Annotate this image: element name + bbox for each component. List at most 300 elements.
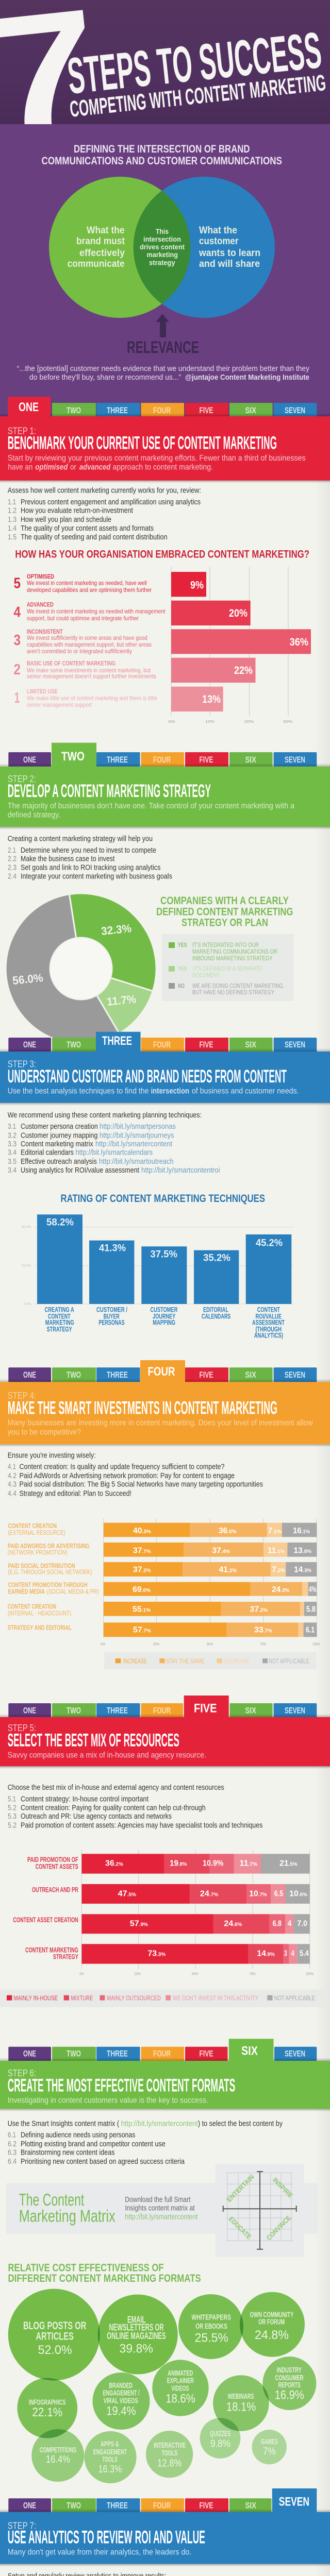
bubble: apps and tools: 16.3% bbox=[98, 2464, 122, 2475]
step 1 checklist bbox=[8, 487, 201, 541]
step 3 checklist: We recommend using these content marketing planning techniques: bbox=[8, 1111, 202, 1120]
bubble: own community bbox=[250, 2310, 293, 2342]
donut legend bbox=[162, 934, 293, 1001]
donut heading: COMPANIES WITH A CLEARLY bbox=[160, 895, 289, 907]
stacked row: content marketing strategy: 14.9% bbox=[257, 1950, 275, 1958]
chart legend: INCREASE bbox=[123, 1657, 147, 1665]
navigation tabs: step five: FOUR bbox=[153, 1706, 171, 1716]
stacked row: content creation internal: 55.1% bbox=[133, 1605, 151, 1614]
step 2 checklist: Determine where you need to invest to compete bbox=[21, 846, 156, 855]
column chart bbox=[22, 1214, 294, 1340]
bubble: competitions bbox=[40, 2446, 76, 2465]
bubble: branded engagement: ENGAGEMENT / bbox=[103, 2388, 140, 2397]
maturity level 5: 5 bbox=[13, 575, 21, 592]
stacked row: outreach and PR: 10.7% bbox=[249, 1890, 267, 1899]
resource mix stacked bar chart bbox=[0, 1850, 326, 2007]
column labels: ROI/VALUE bbox=[256, 1312, 282, 1320]
step 4 checklist: Paid AdWords or Advertising network promotion: Pay for content to engage bbox=[20, 1472, 235, 1480]
bubble: own community: 24.8% bbox=[255, 2328, 289, 2342]
stacked row: earned media: 69.0% bbox=[133, 1585, 151, 1594]
axis labels: 30% bbox=[283, 719, 292, 724]
matrix quadrant diagram: INSPIRE bbox=[271, 2176, 294, 2199]
maturity level 5: developed capabilities and are optimising them further bbox=[27, 586, 152, 594]
stacked row: content marketing strategy: 3 bbox=[284, 1950, 287, 1958]
step 5 checklist: 5.2 bbox=[8, 1822, 16, 1830]
donut legend: MARKETING COMMUNICATIONS OR bbox=[192, 948, 277, 955]
navigation tabs: step five: THREE bbox=[107, 1706, 128, 1716]
venn left label: brand must bbox=[76, 236, 125, 247]
stacked row: content asset creation: 6.8 bbox=[273, 1919, 282, 1928]
matrix quadrant diagram: ENTERTAIN bbox=[225, 2173, 256, 2204]
step 2 banner: The majority of businesses don't have one. Take control of your content marketing with a bbox=[8, 802, 294, 810]
navigation tabs: step three: SIX bbox=[245, 1040, 256, 1049]
step 1 section bbox=[0, 397, 330, 724]
step 4 checklist: 4.2 bbox=[8, 1472, 16, 1480]
navigation tabs: step two: THREE bbox=[107, 755, 128, 765]
row labels: PAID ADWORDS OR ADVERTISING bbox=[8, 1543, 90, 1550]
bubble: apps and tools bbox=[93, 2439, 127, 2475]
chart legend bbox=[104, 1652, 317, 1669]
navigation tabs: step one: THREE bbox=[107, 406, 128, 415]
axis labels: 0% bbox=[79, 1971, 84, 1976]
maturity level 5: OPTIMISED bbox=[27, 573, 54, 580]
bubble chart heading: DIFFERENT CONTENT MARKETING FORMATS bbox=[8, 2273, 201, 2284]
navigation tabs: step seven: FOUR bbox=[153, 2501, 171, 2510]
navigation tabs: step seven: SEVEN bbox=[279, 2495, 309, 2509]
column labels: BUYER bbox=[104, 1312, 120, 1320]
chart heading: rating of techniques: RATING OF CONTENT MARKETING TECHNIQUES bbox=[61, 1193, 265, 1205]
bubble: animated explainer videos bbox=[166, 2369, 195, 2405]
bubble: industry reports: CONSUMER bbox=[275, 2374, 304, 2382]
step 2 checklist: Integrate your content marketing with business goals bbox=[21, 873, 172, 881]
column values bbox=[46, 1216, 283, 1264]
maturity level 3: 3 bbox=[13, 632, 21, 649]
chart legend: MIXTURE bbox=[71, 1994, 93, 2002]
donut chart bbox=[6, 893, 156, 1044]
stacked row: content asset creation: 24.6% bbox=[224, 1919, 242, 1928]
column labels: MARKETING bbox=[45, 1319, 74, 1327]
step 3 banner: intersection bbox=[151, 1087, 189, 1096]
navigation tabs: step five: SIX bbox=[245, 1706, 256, 1716]
venn centre label: drives content bbox=[140, 243, 185, 251]
bubble: own community: OWN COMMUNITY bbox=[250, 2310, 293, 2319]
maturity level 3: We invest suffificiently in some areas and have good bbox=[27, 634, 147, 641]
step 5 checklist: Choose the best mix of in-house and external agency and content resources bbox=[8, 1784, 224, 1792]
venn right label: customer bbox=[199, 236, 239, 247]
bubble: whitepapers: WHITEPAPERS bbox=[191, 2313, 231, 2322]
navigation tabs: step one: TWO bbox=[67, 406, 81, 415]
column labels: CUSTOMER / bbox=[96, 1306, 127, 1314]
bar values: 9% bbox=[190, 580, 204, 591]
axis labels: 10% bbox=[205, 719, 214, 724]
donut heading: STRATEGY OR PLAN bbox=[182, 917, 268, 928]
step 3 checklist: Editorial calendars bbox=[21, 1149, 74, 1157]
stacked row: paid promotion: 10.9% bbox=[203, 1859, 224, 1868]
bubble: competitions: 16.4% bbox=[46, 2454, 70, 2465]
stacked row: content marketing strategy: 5.4 bbox=[300, 1950, 309, 1958]
step 1 checklist: 1.4 bbox=[8, 524, 16, 533]
row labels: (SOCIAL MEDIA & PR) bbox=[47, 1588, 99, 1595]
stacked row: paid adwords: 11.1% bbox=[268, 1546, 285, 1555]
bubble: webinars: 18.1% bbox=[226, 2400, 256, 2414]
maturity level 1: 1 bbox=[14, 690, 20, 706]
step 3 checklist: Using analytics for ROI/value assessment bbox=[21, 1166, 139, 1175]
navigation tabs: step three: TWO bbox=[67, 1040, 81, 1049]
maturity level 1: LIMITED USE bbox=[27, 688, 58, 695]
donut legend: DOCUMENT bbox=[192, 972, 220, 979]
stacked row: paid adwords: 37.7% bbox=[133, 1546, 151, 1555]
navigation tabs: step five: FIVE bbox=[194, 1701, 217, 1715]
venn diagram bbox=[49, 177, 275, 318]
stacked row: paid promotion: 19.8% bbox=[170, 1859, 187, 1868]
matrix panel title: Marketing Matrix bbox=[19, 2207, 116, 2226]
venn right label bbox=[199, 225, 260, 269]
navigation tabs: step three: THREE bbox=[102, 1034, 132, 1048]
matrix panel title: The Content bbox=[19, 2190, 84, 2209]
step 3 checklist: Content marketing matrix bbox=[21, 1140, 93, 1148]
step 2 checklist: 2.3 bbox=[8, 863, 16, 872]
bubble: blog posts: ARTICLES bbox=[36, 2331, 74, 2343]
axis labels: 25% bbox=[134, 1971, 141, 1976]
venn centre label: strategy bbox=[149, 259, 175, 267]
step 1 checklist: Assess how well content marketing currently works for you, review: bbox=[8, 487, 201, 495]
chart legend: DECREASE bbox=[224, 1657, 250, 1665]
step 3 banner bbox=[0, 1052, 330, 1106]
axis labels: 50% bbox=[207, 1641, 213, 1646]
column chart: 25.0% bbox=[22, 1264, 31, 1267]
navigation tabs: step one: SIX bbox=[245, 406, 256, 415]
columns bbox=[37, 1214, 291, 1304]
navigation tabs: step three: ONE bbox=[23, 1040, 36, 1049]
navigation tabs: step two bbox=[0, 743, 330, 769]
step 6 checklist: Defining audience needs using personas bbox=[21, 2131, 135, 2139]
bubble: interactive tools bbox=[154, 2441, 186, 2469]
step 1 checklist: Previous content engagement and amplification using analytics bbox=[21, 498, 201, 506]
navigation tabs: step one: SEVEN bbox=[285, 406, 305, 415]
maturity level 3 bbox=[13, 628, 152, 655]
stacked row: content creation internal: 37.2% bbox=[250, 1605, 268, 1614]
maturity level 4 bbox=[13, 601, 166, 622]
bubble: games: 7% bbox=[263, 2446, 276, 2457]
row labels: CONTENT CREATION bbox=[8, 1603, 56, 1611]
chart legend: STAY THE SAME bbox=[166, 1657, 205, 1665]
stacked row: paid social: 7.2% bbox=[272, 1566, 285, 1574]
step 1 checklist: How well you plan and schedule bbox=[21, 516, 111, 524]
navigation tabs: step seven: SIX bbox=[245, 2501, 256, 2510]
navigation tabs: step one: FOUR bbox=[153, 406, 171, 415]
step 1 banner: optimised bbox=[35, 463, 68, 472]
step 1 banner: or bbox=[70, 463, 76, 472]
step 2 checklist: 2.4 bbox=[8, 873, 16, 881]
step 3 checklist: Effective outreach analysis bbox=[21, 1158, 97, 1166]
matrix quadrant diagram: EDUCATE bbox=[227, 2215, 253, 2241]
quote: do before they'll buy, share or recommend us...” bbox=[29, 373, 181, 382]
step 3 checklist: Customer persona creation bbox=[21, 1123, 98, 1131]
navigation tabs: step three: SEVEN bbox=[285, 1040, 305, 1049]
row labels: OUTREACH AND PR bbox=[32, 1886, 78, 1893]
bubble: interactive tools: INTERACTIVE bbox=[154, 2441, 186, 2450]
venn centre label: marketing bbox=[146, 250, 178, 259]
maturity level 2: 2 bbox=[13, 662, 21, 678]
maturity level 4: 4 bbox=[13, 604, 21, 621]
bubble: games bbox=[261, 2437, 278, 2457]
step 3 checklist: 3.1 bbox=[8, 1123, 16, 1131]
matrix panel title bbox=[19, 2190, 116, 2226]
bubble: quizzes: 9.8% bbox=[210, 2438, 230, 2449]
navigation tabs: step six bbox=[0, 2039, 330, 2062]
step 7 banner bbox=[0, 2512, 330, 2567]
step 5 checklist bbox=[8, 1784, 262, 1830]
stacked row: paid adwords: 37.4% bbox=[212, 1546, 230, 1555]
step 6 banner: STEP 6: bbox=[8, 2067, 36, 2078]
row labels: CONTENT ASSETS bbox=[36, 1862, 78, 1870]
step 1 banner: STEP 1: bbox=[8, 426, 36, 436]
step 1 banner: advanced bbox=[79, 463, 111, 472]
donut legend: NO bbox=[178, 982, 185, 990]
step 6 checklist: 6.3 bbox=[8, 2149, 16, 2157]
column values: 35.2% bbox=[203, 1252, 230, 1264]
step 3 checklist: http://bit.ly/smartercontent bbox=[95, 1140, 172, 1148]
stacked row: outreach and PR: 6.5 bbox=[274, 1890, 283, 1899]
step 5 checklist: Paid promotion of content assets: Agencies may have specialist tools and techniques bbox=[21, 1822, 262, 1830]
navigation tabs: step seven: ONE bbox=[23, 2501, 36, 2510]
column labels: CONTENT bbox=[257, 1306, 280, 1314]
stacked row: outreach and PR: 47.5% bbox=[118, 1890, 136, 1899]
bubble: email newsletters: EMAIL bbox=[127, 2314, 145, 2325]
navigation tabs: step five: TWO bbox=[67, 1706, 81, 1716]
chart legend: MAINLY OUTSOURCED bbox=[107, 1994, 161, 2002]
stacked row: paid social bbox=[104, 1562, 317, 1577]
step 4 banner: you to be competitive? bbox=[8, 1428, 81, 1436]
investment stacked bar chart bbox=[8, 1518, 320, 1669]
panel: content marketing matrix bbox=[6, 2164, 318, 2257]
column labels: PERSONAS bbox=[98, 1319, 125, 1327]
navigation tabs: step two: TWO bbox=[61, 750, 85, 764]
maturity level 3: capabilities with management support, but other areas bbox=[27, 641, 152, 648]
bubble: email newsletters: ONLINE MAGAZINES bbox=[107, 2331, 166, 2341]
step 1 checklist: 1.5 bbox=[8, 533, 16, 541]
step 3 banner: STEP 3: bbox=[8, 1059, 36, 1070]
step 2 checklist bbox=[8, 835, 172, 881]
donut heading: DEFINED CONTENT MARKETING bbox=[156, 906, 293, 918]
bubble: branded engagement: BRANDED bbox=[109, 2381, 133, 2390]
navigation tabs: step five bbox=[0, 1696, 330, 1719]
step 5 checklist: 5.1 bbox=[8, 1795, 16, 1804]
venn left label: What the bbox=[87, 225, 125, 236]
donut legend: INBOUND MARKETING STRATEGY bbox=[192, 955, 273, 962]
step 3 checklist: http://bit.ly/smartcontentroi bbox=[141, 1166, 220, 1175]
step 4 checklist: Content creation: Is quality and update frequency sufficient to compete? bbox=[20, 1463, 225, 1471]
step 7 banner: STEP 7: bbox=[8, 2520, 36, 2531]
step 2 checklist: 2.2 bbox=[8, 855, 16, 863]
navigation tabs: step five: SEVEN bbox=[285, 1706, 305, 1716]
stacked row: strategy and editorial: 6.1 bbox=[306, 1625, 315, 1634]
step 3 banner: of business and customer needs. bbox=[192, 1087, 299, 1096]
step 5 checklist: Content creation: Paying for quality content can help cut-through bbox=[21, 1804, 206, 1812]
matrix quadrant diagram bbox=[223, 2172, 296, 2249]
stacked row: paid promotion: 11.7% bbox=[239, 1859, 257, 1868]
step 3 checklist: http://bit.ly/smartjourneys bbox=[100, 1131, 174, 1140]
stacked row: content marketing strategy bbox=[81, 1944, 310, 1964]
step 2 checklist: Make the business case to invest bbox=[21, 855, 114, 863]
bubble: whitepapers: 25.5% bbox=[195, 2331, 228, 2345]
stacked row: paid promotion: 21.5% bbox=[279, 1859, 298, 1868]
bubble: industry reports: 16.9% bbox=[275, 2388, 304, 2402]
stacked row: content creation external: 40.3% bbox=[133, 1527, 151, 1535]
navigation tabs: step three bbox=[0, 1032, 330, 1054]
donut legend: IT'S INTEGRATED INTO OUR bbox=[192, 941, 259, 948]
step 3 checklist: http://bit.ly/smartoutreach bbox=[99, 1158, 174, 1166]
intro heading bbox=[41, 143, 282, 167]
axis labels bbox=[101, 1641, 320, 1646]
maturity level 1: senior management support bbox=[27, 701, 92, 708]
bubble: animated explainer videos: 18.6% bbox=[166, 2392, 195, 2405]
axis labels: 0% bbox=[168, 719, 175, 724]
navigation tabs: step two: ONE bbox=[23, 755, 36, 765]
navigation tabs: step five: ONE bbox=[23, 1706, 36, 1716]
bubble chart heading: RELATIVE COST EFFECTIVENESS OF bbox=[8, 2262, 164, 2274]
bubble: animated explainer videos: EXPLAINER bbox=[167, 2377, 194, 2385]
column labels: STRATEGY bbox=[47, 1325, 72, 1333]
navigation tabs: step six: SEVEN bbox=[285, 2049, 305, 2059]
step 1 checklist: How you evaluate return-on-investment bbox=[21, 507, 133, 515]
navigation tabs: step three: FIVE bbox=[199, 1040, 213, 1049]
bubble: whitepapers: OR EBOOKS bbox=[195, 2322, 227, 2331]
maturity bar chart bbox=[13, 567, 311, 724]
row labels: CONTENT CREATION bbox=[8, 1522, 57, 1530]
axis labels: 75% bbox=[249, 1971, 256, 1976]
bubble: branded engagement: 19.4% bbox=[106, 2404, 136, 2418]
navigation tabs: step seven: TWO bbox=[67, 2501, 81, 2510]
navigation tabs: step two: SEVEN bbox=[285, 755, 305, 765]
row labels: CONTENT PROMOTION THROUGH bbox=[8, 1582, 87, 1589]
step 2 checklist: Creating a content marketing strategy will help you bbox=[8, 835, 153, 843]
step 3 checklist: http://bit.ly/smartpersonas bbox=[100, 1123, 176, 1131]
stacked row: content marketing strategy: 73.3% bbox=[147, 1950, 166, 1958]
step 6 checklist: Prioritising new content based on agreed success criteria bbox=[21, 2158, 185, 2166]
matrix panel download note: Insights content matrix at bbox=[125, 2205, 195, 2213]
navigation tabs: step seven: THREE bbox=[107, 2501, 128, 2510]
axis labels: 100% bbox=[312, 1641, 320, 1646]
donut values: 56.0% bbox=[12, 971, 44, 987]
step 6 checklist: 6.4 bbox=[8, 2158, 16, 2166]
navigation tabs: step four: FIVE bbox=[199, 1370, 213, 1380]
navigation tabs: step six: TWO bbox=[67, 2049, 81, 2059]
navigation tabs: step seven bbox=[0, 2488, 330, 2514]
column labels: CREATING A bbox=[44, 1306, 74, 1314]
maturity level 5 bbox=[13, 573, 152, 594]
step 2 section bbox=[0, 743, 330, 1044]
stacked row: paid social: 37.2% bbox=[133, 1566, 151, 1574]
bar values: 13% bbox=[202, 693, 221, 705]
intro heading: COMMUNICATIONS AND CUSTOMER COMMUNICATIONS bbox=[41, 155, 282, 167]
stacked row: content asset creation: 7.0 bbox=[297, 1919, 307, 1928]
bubble: infographics bbox=[29, 2398, 65, 2419]
stacked row: content asset creation: 57.9% bbox=[130, 1919, 148, 1928]
step 2 banner: STEP 2: bbox=[8, 773, 36, 784]
step 4 checklist: 4.1 bbox=[8, 1463, 16, 1471]
venn left label: effectively bbox=[79, 248, 125, 259]
matrix quadrant diagram: CONVINCE bbox=[265, 2214, 292, 2242]
bubble: email newsletters bbox=[107, 2314, 166, 2356]
stacked row: paid social: 41.2% bbox=[219, 1566, 237, 1574]
stacked row: strategy and editorial: 33.7% bbox=[254, 1625, 272, 1634]
stacked row: outreach and PR bbox=[81, 1884, 310, 1904]
step 3 checklist: 3.2 bbox=[8, 1131, 16, 1140]
bubble: webinars: WEBINARS bbox=[228, 2392, 254, 2401]
matrix panel download note bbox=[125, 2196, 198, 2221]
row labels: (INTERNAL - HEADCOUNT). bbox=[8, 1610, 73, 1617]
row labels: CONTENT ASSET CREATION bbox=[13, 1916, 78, 1924]
step 5 banner bbox=[0, 1717, 330, 1769]
maturity level 2: senior management doesn't support further investments bbox=[27, 673, 156, 680]
bubble: apps and tools: APPS & bbox=[101, 2439, 119, 2448]
bubble: webinars bbox=[226, 2392, 256, 2414]
donut legend: WE ARE DOING CONTENT MARKETING, bbox=[192, 982, 284, 990]
step 1 banner: have an bbox=[8, 463, 32, 472]
row labels: PAID PROMOTION OF bbox=[27, 1856, 78, 1863]
column values: 58.2% bbox=[46, 1216, 74, 1228]
step 6 section bbox=[0, 2039, 330, 2483]
bubble: blog posts: BLOG POSTS OR bbox=[23, 2320, 86, 2332]
step 7 section bbox=[0, 2488, 330, 2576]
column labels: (THROUGH bbox=[256, 1325, 282, 1333]
step 1 checklist: The quality of your content assets and formats bbox=[21, 524, 154, 533]
row labels: (E.G. THROUGH SOCIAL NETWORK) bbox=[8, 1569, 92, 1576]
step 2 checklist: 2.1 bbox=[8, 846, 16, 855]
navigation tabs: step four bbox=[0, 1360, 330, 1384]
step 2 checklist: Set goals and link to ROI tracking using analytics bbox=[21, 863, 160, 872]
bubble: games: GAMES bbox=[261, 2437, 278, 2446]
bubble: animated explainer videos: VIDEOS bbox=[171, 2384, 189, 2393]
axis labels: 50% bbox=[192, 1971, 198, 1976]
stacked row: strategy and editorial: 57.7% bbox=[133, 1625, 151, 1634]
step 4 checklist: 4.3 bbox=[8, 1481, 16, 1489]
chart legend: NOT APPLICABLE bbox=[274, 1994, 315, 2002]
bar values: 20% bbox=[229, 607, 248, 619]
step 5 checklist: 5.3 bbox=[8, 1812, 16, 1821]
header: title banner bbox=[0, 0, 330, 168]
venn left label bbox=[68, 225, 125, 269]
matrix panel download note: Download the full Smart bbox=[125, 2196, 190, 2204]
axis labels: 25% bbox=[153, 1641, 159, 1646]
column values: 37.5% bbox=[150, 1249, 177, 1260]
stacked row: earned media bbox=[104, 1582, 317, 1596]
venn right label: What the bbox=[199, 225, 237, 236]
stacked row: paid promotion: 36.2% bbox=[105, 1859, 123, 1868]
maturity level 1 bbox=[14, 688, 157, 708]
maturity level 4: support, but could optimise and integrate further bbox=[27, 615, 139, 622]
navigation tabs: step six: FIVE bbox=[199, 2049, 213, 2059]
donut values bbox=[12, 922, 137, 1008]
bars bbox=[171, 572, 311, 711]
step 3 checklist: 3.4 bbox=[8, 1149, 16, 1157]
column values: 45.2% bbox=[256, 1237, 283, 1248]
column labels: CONTENT bbox=[48, 1312, 71, 1320]
step 3 checklist: 3.4 bbox=[8, 1166, 16, 1175]
column chart: 50.0% bbox=[22, 1226, 31, 1229]
bubble: interactive tools: TOOLS bbox=[162, 2449, 177, 2458]
venn right label: wants to learn bbox=[199, 248, 260, 259]
intro heading: DEFINING THE INTERSECTION OF BRAND bbox=[74, 143, 250, 155]
step 3 section bbox=[0, 1032, 330, 1340]
chart legend: NOT APPLICABLE bbox=[269, 1657, 309, 1665]
chart legend: MAINLY IN-HOUSE bbox=[13, 1994, 58, 2002]
venn centre label bbox=[140, 227, 185, 267]
step 4 banner bbox=[0, 1382, 330, 1447]
axis labels: 75% bbox=[260, 1641, 266, 1646]
step 6 checklist: 6.2 bbox=[8, 2140, 16, 2148]
